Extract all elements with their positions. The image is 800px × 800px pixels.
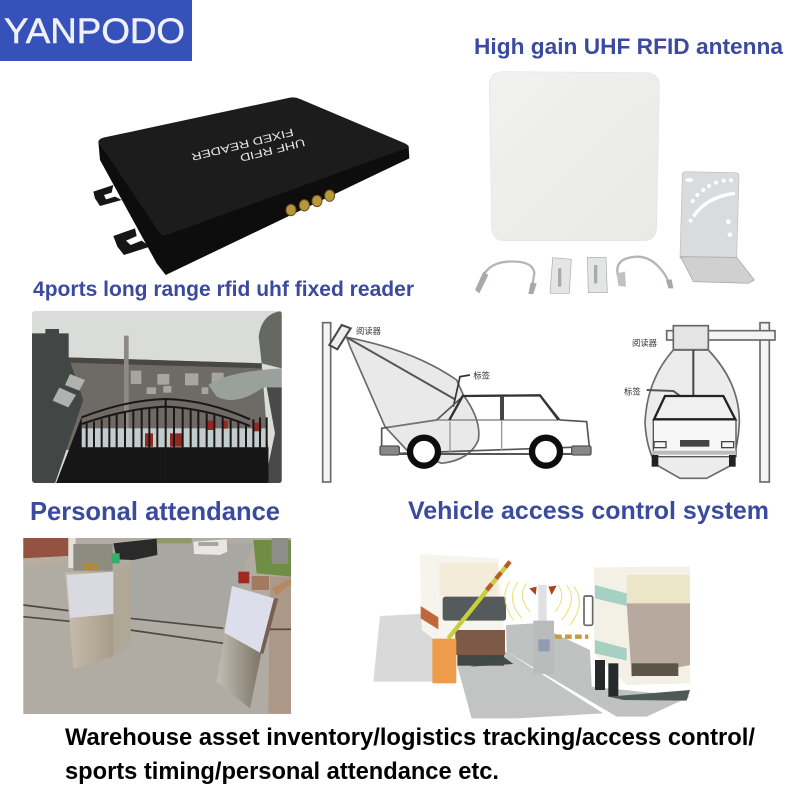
radiation beam	[347, 337, 479, 463]
right pedestal	[217, 572, 292, 708]
mounting plates	[550, 257, 607, 293]
heading: personal attendance: Personal attendance	[30, 496, 280, 526]
heading: reader caption: 4ports long range rfid uhf fixed reader	[33, 278, 414, 301]
gantry	[760, 323, 769, 482]
brick pillar	[32, 329, 83, 483]
wheels	[410, 438, 438, 466]
parked cars	[113, 539, 227, 560]
photo: personnel gates on road	[23, 538, 292, 715]
road surface and shadow	[373, 614, 690, 718]
gate lower panel	[56, 417, 268, 483]
text block: applications list: Warehouse asset inventory/logistics tracking/access control/	[65, 724, 755, 751]
white lower band behind gate	[82, 428, 267, 448]
U bolt left	[475, 261, 537, 294]
device printed label: FIXED READER	[190, 126, 295, 163]
beam lobe	[645, 350, 739, 478]
diagram: vehicle front view	[624, 323, 775, 482]
heading: antenna caption: High gain UHF RFID antenna	[474, 34, 784, 59]
antenna panel	[489, 72, 659, 241]
reader	[329, 325, 351, 349]
RFID signal waves	[505, 582, 579, 625]
L bracket	[680, 172, 754, 283]
right truck	[584, 567, 690, 701]
reader label: 阅读器	[356, 326, 382, 336]
text block: applications list: sports timing/personal attendance etc.	[65, 758, 499, 785]
device side faces	[98, 142, 409, 275]
U bolt right	[617, 257, 673, 288]
sky	[30, 310, 283, 487]
logo: YANPODO: YANPODO	[4, 12, 185, 51]
gold antenna ports	[286, 190, 335, 216]
antenna units on pillar	[53, 374, 85, 407]
illustration: trucks at barrier with RFID reader	[373, 554, 690, 718]
bumpers	[380, 446, 399, 455]
heading: vehicle access control: Vehicle access control system	[408, 497, 769, 525]
tag label: 标签	[624, 387, 641, 397]
second barrier arm	[555, 630, 588, 643]
left pedestal	[65, 538, 131, 669]
utility pole	[124, 336, 129, 446]
text block: applications list	[65, 724, 755, 785]
left truck	[420, 554, 513, 667]
photo: gate with antennas	[30, 310, 283, 487]
road cracks	[23, 605, 292, 643]
pavement	[23, 538, 292, 715]
diagram: vehicle side view	[323, 323, 591, 482]
tag label: 标签	[473, 370, 491, 380]
mounting brackets	[93, 185, 150, 255]
barrier gate	[432, 562, 510, 683]
image: antenna and mounting kit	[475, 72, 754, 294]
building	[67, 357, 268, 450]
right curved canopy and column	[208, 311, 282, 483]
device top face	[98, 97, 409, 235]
device printed label	[190, 126, 306, 164]
pole	[323, 323, 331, 482]
gate arch and bars	[81, 398, 268, 448]
device printed label: UHF RFID	[238, 136, 306, 164]
logo: YANPODO	[0, 0, 192, 61]
car front	[653, 396, 736, 457]
car body	[382, 395, 589, 454]
image: UHF RFID fixed reader	[93, 97, 409, 275]
diagram: vehicle front view: 阅读器	[632, 338, 658, 348]
reader post	[529, 585, 557, 674]
